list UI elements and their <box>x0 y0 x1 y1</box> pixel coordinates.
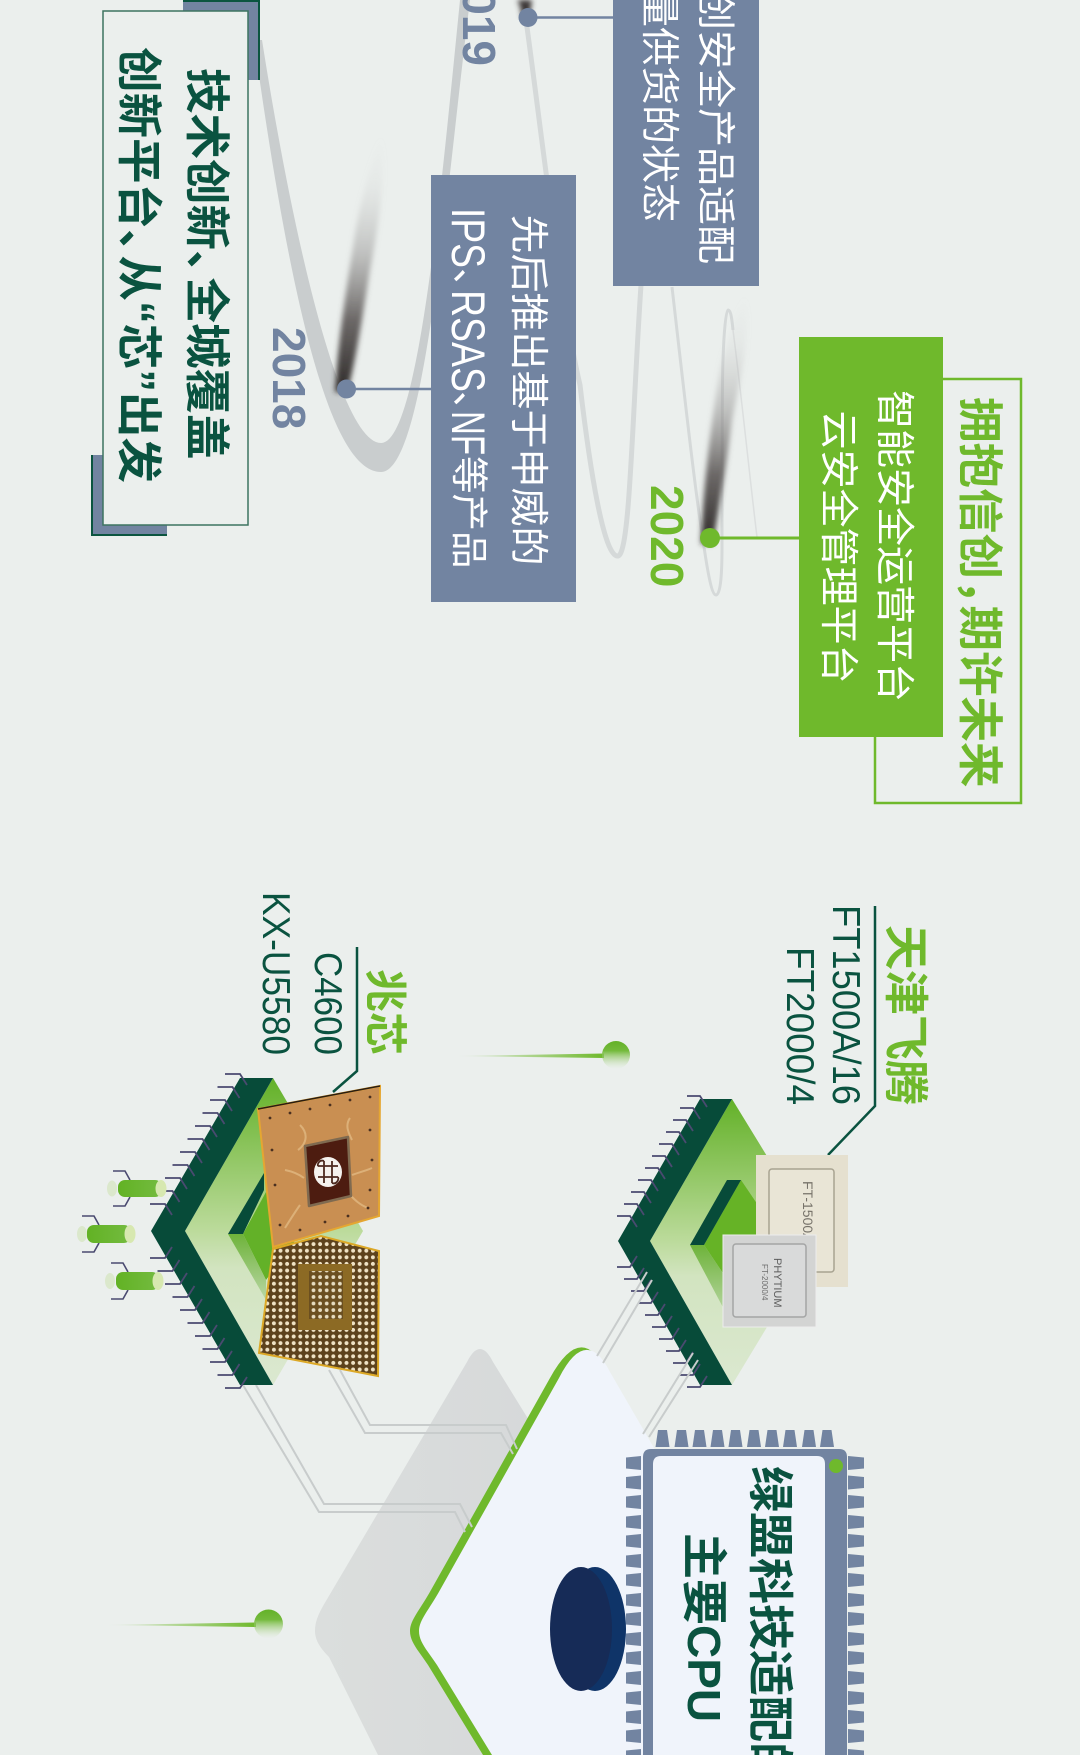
panel: 2018 description: 、 <box>447 391 490 430</box>
panel: 2018 description: RSAS <box>442 290 495 392</box>
panel: 2020 description <box>799 337 943 737</box>
panel: 2018 description: 、 <box>447 268 490 307</box>
panel: 2020 heading outline: 拥抱信创，期许未来 <box>954 397 1005 788</box>
leader and label: Zhaoxin <box>254 892 408 1092</box>
bead: lower <box>105 1610 283 1638</box>
streak: 2020 <box>701 295 747 544</box>
grey hexagon shadow <box>315 1349 640 1755</box>
panel: 2020 heading outline <box>875 379 1021 803</box>
leader and label: Tianjin Phytium: FT2000/4 <box>778 947 821 1105</box>
wave ribbon: 2018 to 2019 <box>254 0 470 472</box>
connector: 2020 <box>700 528 799 548</box>
leader and label: Zhaoxin: 兆芯 <box>360 969 408 1055</box>
chip: right CPU socket (Phytium) <box>617 1096 819 1387</box>
panel: 2018 description: IPS <box>442 208 495 268</box>
panel: 2018 description: 先后推出基于申威的 <box>506 214 549 566</box>
panel: 2018 description <box>431 175 576 602</box>
text: innovation platform: 创新平台、从“芯”出发 <box>113 47 164 483</box>
chip: FT-1500A <box>756 1155 848 1287</box>
panel: technology innovation card <box>92 0 260 536</box>
year label: 2020: 2020 <box>641 485 693 587</box>
chip: Zhaoxin ball-grid underside <box>259 1236 379 1376</box>
chip: FT-2000/4 <box>723 1235 816 1327</box>
panel: 2019 description <box>613 0 759 286</box>
circuit traces: Zhaoxin to panel <box>243 1370 517 1532</box>
connector: 2018 <box>337 380 431 398</box>
circuit traces: Phytium to panel <box>597 1272 698 1437</box>
chip pins <box>626 1430 864 1755</box>
streak: 2018 <box>335 135 383 392</box>
panel: main CPU chip <box>626 1430 864 1755</box>
wave ribbon: 2019 to 2020 <box>526 20 757 595</box>
leader and label: Tianjin Phytium <box>778 905 931 1155</box>
panel: 2020 description: 云安全管理平台 <box>816 410 859 684</box>
panel: 2020 description: 智能安全运营平台 <box>872 390 915 702</box>
leader and label: Tianjin Phytium: FT1500A/16 <box>824 905 867 1105</box>
bead: upper <box>455 1041 630 1069</box>
dark oval <box>550 1567 626 1691</box>
panel: 2018 description: 等产品 <box>448 456 490 568</box>
heading: main CPU: 主要CPU <box>678 1533 730 1722</box>
icons: green resistors <box>77 1171 166 1299</box>
chip: Zhaoxin top with logo <box>258 1086 380 1247</box>
chip: left CPU socket (Zhaoxin) <box>150 1074 363 1388</box>
heading: technology innovation: 技术创新、全城覆盖 <box>181 68 232 460</box>
leader and label: Zhaoxin: C4600 <box>306 952 349 1055</box>
streak: 2019 <box>517 0 532 18</box>
panel: 2018 description: NF <box>442 411 495 455</box>
leader and label: Zhaoxin: KX-U5580 <box>254 892 297 1055</box>
chip: FT-2000/4: PHYTIUM <box>771 1258 783 1308</box>
leader and label: Tianjin Phytium: 天津飞腾 <box>880 925 931 1105</box>
connector: 2019 <box>518 8 613 27</box>
year label: 2018: 2018 <box>263 327 315 429</box>
chip: FT-1500A: FT-1500A <box>800 1181 816 1243</box>
chip: FT-2000/4: FT-2000/4 <box>760 1264 769 1301</box>
panel: white hexagon with green edge <box>410 1347 760 1755</box>
